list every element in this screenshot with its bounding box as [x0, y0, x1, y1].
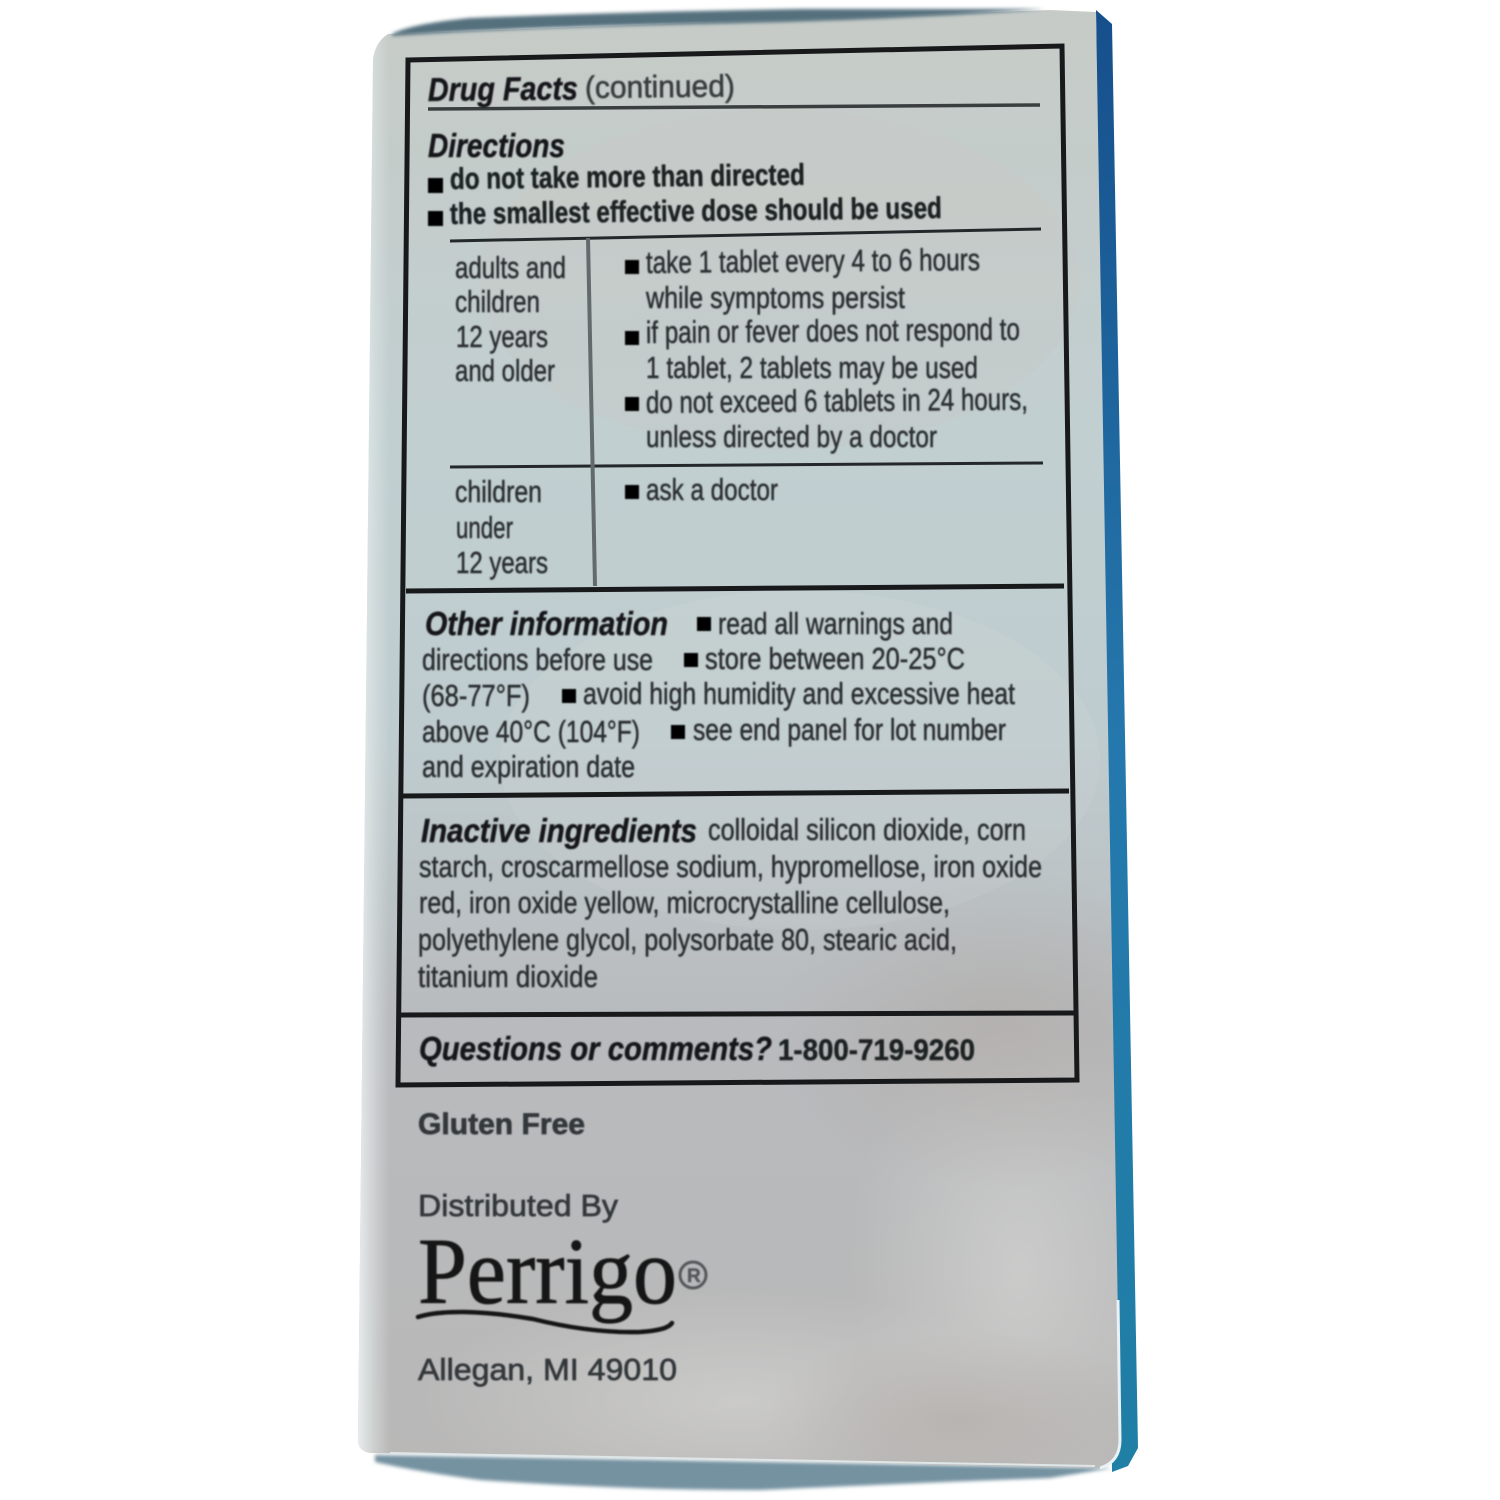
inactive ingredients section: red, iron oxide yellow, microcrystalline cellulose,	[419, 885, 950, 920]
other information section: store between 20-25°C	[705, 641, 965, 676]
dosing row: adults and children 12 years and older: if pain or fever does not respond to	[646, 312, 1020, 350]
other information section: (68-77°F)	[422, 678, 530, 713]
directions heading and general rules: do not take more than directed	[450, 159, 805, 196]
top flap of box	[392, 9, 1045, 36]
header: Drug Facts (continued): (continued)	[585, 68, 735, 105]
dosing row: children under 12 years: 12 years	[456, 545, 548, 580]
logo: Perrigo: Perrigo	[418, 1220, 677, 1324]
questions line: 1-800-719-9260	[778, 1034, 975, 1067]
header: Drug Facts (continued): Drug Facts	[428, 69, 578, 108]
other information section: see end panel for lot number	[693, 712, 1006, 747]
product box photo	[358, 6, 1138, 1492]
blue side of box	[1096, 10, 1138, 1472]
inactive ingredients section: polyethylene glycol, polysorbate 80, stearic acid,	[418, 922, 957, 957]
gluten free note: Gluten Free	[418, 1108, 585, 1141]
inactive ingredients section: starch, croscarmellose sodium, hypromellose, iron oxide	[419, 849, 1042, 884]
dosing row: children under 12 years: ask a doctor	[646, 472, 778, 507]
questions line: Questions or comments?	[419, 1030, 772, 1067]
distributed by: Distributed By	[418, 1188, 619, 1223]
other information section: directions before use	[422, 642, 653, 677]
directions heading and general rules	[428, 127, 942, 231]
silver panel	[358, 10, 1122, 1470]
dosing row: adults and children 12 years and older: do not exceed 6 tablets in 24 hours,	[646, 382, 1028, 420]
bottom flap of box	[375, 1455, 1112, 1490]
dosing row: adults and children 12 years and older: 1 tablet, 2 tablets may be used	[646, 350, 978, 385]
other information section: above 40°C (104°F)	[422, 714, 640, 749]
other information section	[422, 605, 1015, 784]
dosing row: adults and children 12 years and older: take 1 tablet every 4 to 6 hours	[646, 242, 980, 280]
directions heading and general rules: Directions	[428, 127, 565, 164]
dosing row: children under 12 years	[455, 472, 778, 580]
other information section: Other information	[425, 605, 668, 642]
dosing row: adults and children 12 years and older: adults and	[455, 250, 566, 285]
dosing row: adults and children 12 years and older: 12 years	[456, 319, 548, 354]
inactive ingredients section: titanium dioxide	[418, 959, 598, 994]
other information section: avoid high humidity and excessive heat	[583, 676, 1015, 711]
logo: Perrigo: R	[687, 1266, 701, 1287]
drug facts table frame	[398, 46, 1077, 1085]
inactive ingredients section: Inactive ingredients	[421, 812, 697, 849]
dosing row: adults and children 12 years and older: children	[455, 284, 540, 319]
other information section: read all warnings and	[718, 606, 953, 641]
directions heading and general rules: the smallest effective dose should be used	[450, 192, 942, 231]
other information section: and expiration date	[422, 749, 635, 784]
dosing row: adults and children 12 years and older: unless directed by a doctor	[646, 419, 937, 454]
section dividers	[400, 586, 1075, 1015]
dosing row: adults and children 12 years and older: and older	[455, 353, 555, 388]
inactive ingredients section: colloidal silicon dioxide, corn	[708, 812, 1026, 847]
dosing row: adults and children 12 years and older: while symptoms persist	[645, 280, 905, 315]
dosing row: children under 12 years: under	[456, 510, 513, 545]
header: Drug Facts (continued)	[428, 68, 735, 108]
address: Allegan, MI 49010	[418, 1352, 677, 1387]
inactive ingredients section	[418, 812, 1042, 994]
section rules	[428, 105, 1043, 586]
dosing row: adults and children 12 years and older	[455, 242, 1028, 454]
dosing row: children under 12 years: children	[455, 474, 542, 509]
